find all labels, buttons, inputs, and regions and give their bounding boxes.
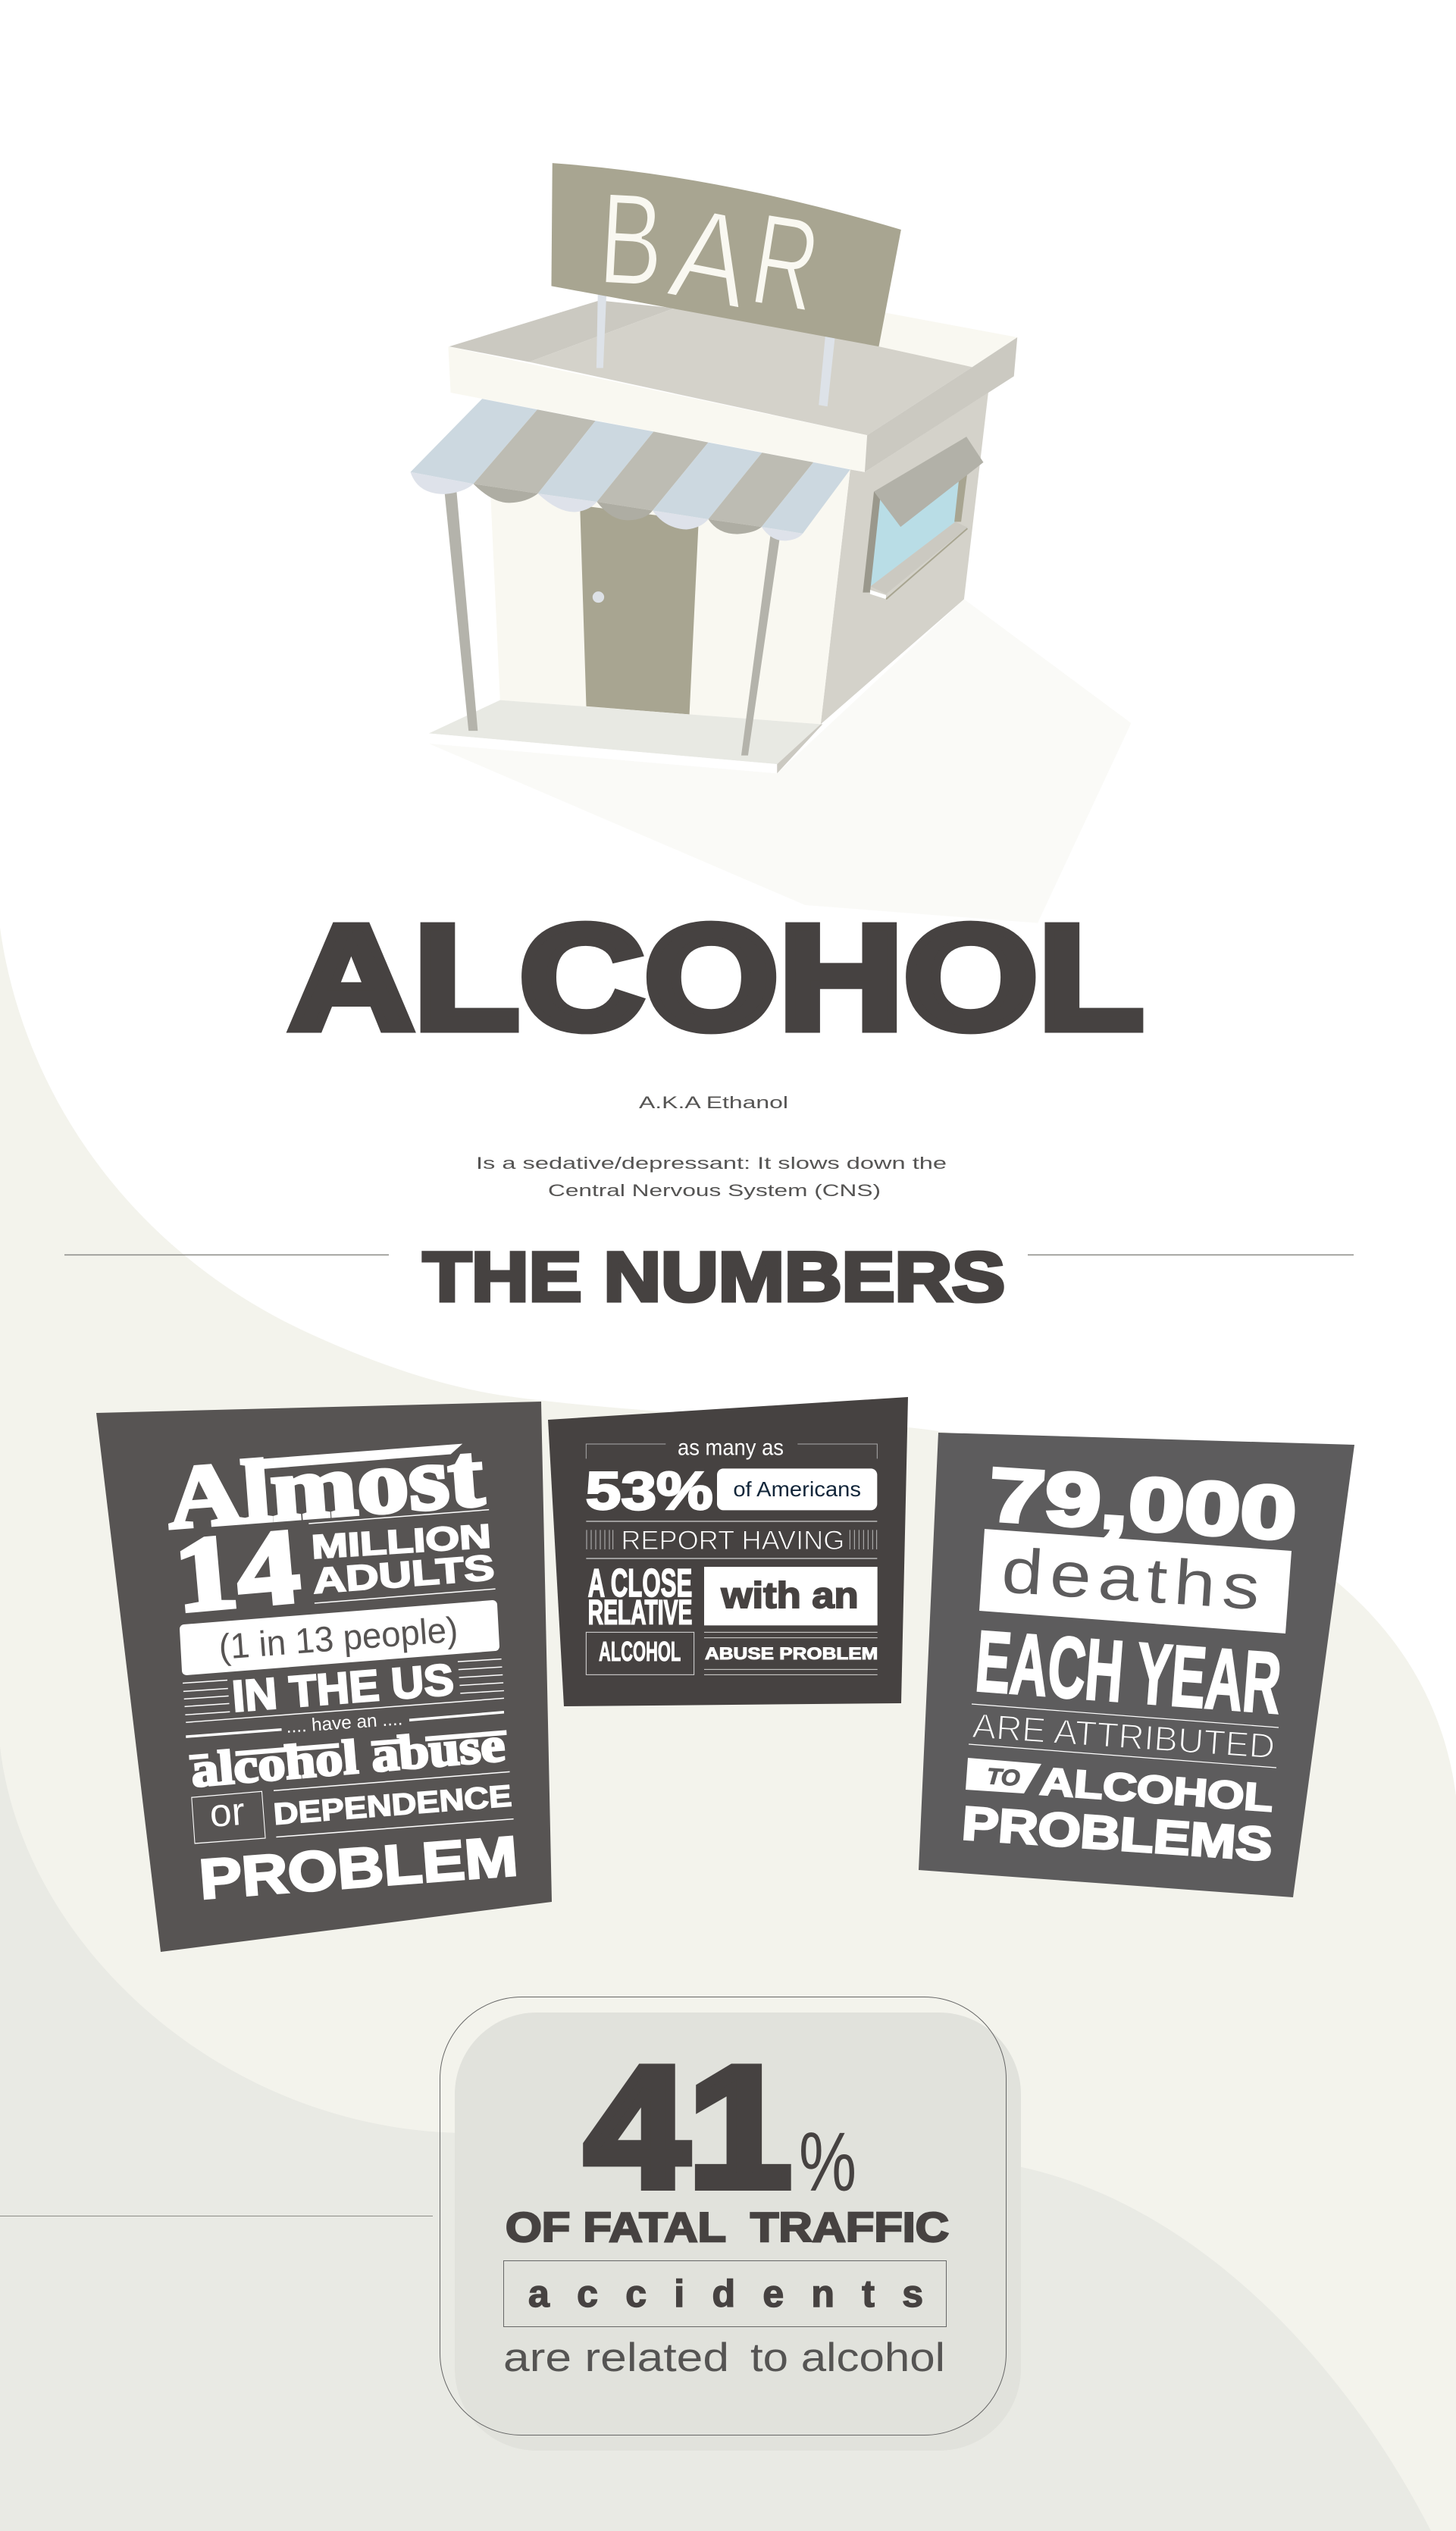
text: of fatal traffic [506,2204,949,2251]
front wall [490,469,850,724]
text: percent sign: % [799,2116,856,2209]
text: A CLOSE: A CLOSE [588,1561,692,1605]
heading: THE NUMBERS: THE NUMBERS [423,1239,1005,1316]
text: of fatal traffic: OF FATAL [506,2204,726,2251]
description text [476,1154,947,1200]
text: ABUSE PROBLEM: ABUSE PROBLEM [705,1644,878,1663]
text: are related to alcohol: are related [503,2335,729,2380]
text: ALCOHOL: ALCOHOL [1038,1759,1275,1820]
sign board [551,163,901,346]
text: of Americans: of Americans [733,1477,861,1501]
illustration: bar building [411,163,1131,923]
text: are related to alcohol: to alcohol [750,2335,945,2380]
porch floor [429,700,821,764]
sign lettering: BAR: R [743,186,828,340]
outlined box [586,1632,694,1674]
text: ALCOHOL: ALCOHOL [599,1636,681,1667]
sign lettering: BAR [596,165,828,340]
pole left [444,490,478,731]
text: of fatal traffic: TRAFFIC [750,2204,949,2251]
text: 53%: 53% [586,1461,713,1521]
callout panel: 41% of fatal traffic accidents [440,1997,1021,2451]
sign post right [819,334,835,406]
panel outline [440,1997,1007,2435]
text: DEPENDENCE: DEPENDENCE [272,1779,513,1831]
window [863,437,983,599]
text: 79,000: 79,000 [987,1452,1299,1555]
text: are related to alcohol [503,2335,945,2380]
text: ADULTS: ADULTS [312,1547,496,1601]
description text: Is a sedative/depressant: It slows down the [476,1154,947,1173]
text: PROBLEMS: PROBLEMS [960,1797,1274,1872]
porch edge [429,734,777,773]
white box [704,1567,878,1625]
TO tag [966,1758,1041,1793]
title: ALCOHOL: ALCOHOL [289,894,1144,1060]
top bracket [586,1444,877,1458]
card background [919,1433,1354,1897]
text: as many as: as many as [678,1435,784,1460]
sign lettering: BAR: B [596,165,667,314]
subtitle: A.K.A Ethanol: A.K.A Ethanol [639,1093,788,1112]
text: accidents: accidents [528,2273,923,2315]
text: have an: .... have an .... [286,1709,403,1737]
roof back rim [878,312,1017,367]
porch side [777,724,822,773]
text: RELATIVE: RELATIVE [588,1593,692,1632]
text: alcohol abuse: alcohol abuse [189,1717,507,1797]
rounded highlight bar [184,1605,495,1671]
roof front fascia [448,346,867,472]
text: Almost: Almost [164,1425,487,1548]
text: or: or [208,1790,246,1836]
sign lettering: BAR: A [660,179,762,336]
white pill [717,1468,877,1510]
text: 41: 41 [585,2031,791,2222]
building ground shadow [429,599,1131,923]
text: 14: 14 [170,1507,304,1635]
panel: 14 million adults [96,1402,552,1952]
panel: 53% of Americans [548,1397,908,1706]
roof side fascia [865,337,1017,472]
text: TO: TO [986,1764,1021,1791]
awning stripes [411,399,850,540]
door [580,506,699,715]
text: 1 in 13 people: (1 in 13 people) [218,1609,459,1667]
panel fill [455,2013,1021,2451]
text: PROBLEM: PROBLEM [197,1825,520,1911]
text: MILLION: MILLION [311,1518,492,1566]
text: with an: with an [721,1575,859,1616]
panel: 79,000 deaths [919,1433,1354,1897]
sign post left [596,290,606,368]
right wall [821,393,988,724]
white band [979,1529,1292,1634]
card background [96,1402,552,1952]
outlined box [503,2260,946,2327]
description text: Central Nervous System (CNS) [548,1181,881,1200]
text: REPORT HAVING: REPORT HAVING [621,1526,844,1555]
text: deaths: deaths [1000,1534,1269,1624]
roof top dark [449,300,675,362]
pole right [741,536,780,756]
card background [548,1397,908,1706]
text: IN THE US: IN THE US [230,1655,456,1721]
door knob [593,591,604,603]
text: ARE ATTRIBUTED: ARE ATTRIBUTED [971,1706,1276,1766]
roof top light [529,308,972,435]
